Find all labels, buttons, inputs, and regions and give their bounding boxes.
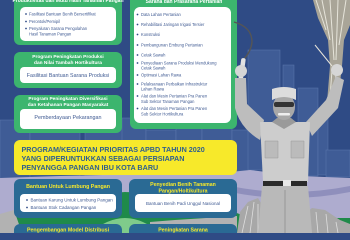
panel: diversification: Pemberdayaan Pekarangan [34,115,102,121]
title banner: YANG DIPERUNTUKKAN SEBAGAI PERSIAPAN [22,154,184,163]
list: Alat dan Mesin Pertanian Pra Panen [141,106,208,111]
list: Bantuan Karung Untuk Lumbung Pangan [30,198,113,202]
photo: farmer raising sickle and rice [234,0,350,233]
list: Perontok/Pemipil [29,19,60,24]
straw pile [237,198,350,233]
title banner [14,140,237,175]
panel: distribution model [14,224,122,240]
cap [272,87,296,100]
shirt pockets [265,141,304,158]
list: Sub Sektor Tanaman Pangan [141,99,195,104]
list: Penyaluran Sarana Pengolahan [29,26,88,31]
list: Lahan Rawa [141,86,165,92]
card [20,109,116,129]
list: Alat dan Mesin Pertanian Pra Panen [141,94,208,98]
trousers [258,186,312,233]
list: Cetak Sawah [141,66,166,70]
arms [235,78,264,140]
panel: production facilities [12,0,124,45]
green hill [0,192,350,233]
list [25,12,97,36]
heading: dan Nilai Tambah Hortikultura [34,60,102,66]
skyline background [0,50,350,180]
lilac ground [0,170,350,233]
list: Hasil Tanaman Pangan [29,32,72,36]
panel: seed supply [129,179,237,218]
panel: diversification [14,95,122,133]
list: Penyediaan Sarana Produksi Mendukung [141,60,217,66]
heading: dan Ketahanan Pangan Masyarakat [28,102,109,108]
sickle [234,22,252,60]
card [135,194,231,212]
rice bundle [313,0,350,102]
list [26,198,113,210]
list: Bantuan Stok Cadangan Pangan [30,205,97,210]
list: Konstruksi [141,32,160,37]
torso [260,122,310,182]
panel: seed supply: Bantuan Benih Padi Unggul Nasional [146,201,220,206]
hands [235,65,247,77]
heading: Program Peningkatan Produksi [32,54,104,60]
card [20,194,116,212]
straw left [0,210,237,233]
heading: Pangan/Holtikultura [158,188,208,194]
card [20,67,116,83]
list: Optimasi Lahan Rawa [141,72,182,78]
list [137,12,217,116]
list: Pelaksanaan Perbaikan Infrastruktur [141,82,208,86]
panel: horticulture: Fasilitasi Bantuan Sarana Produksi [27,73,109,79]
heading: Bantuan Untuk Lumbung Pangan [26,184,110,190]
panel: infrastructure [130,0,237,129]
heading: Program Peningkatan Diversifikasi [28,96,108,102]
list: Rehabilitasi Jaringan Irigasi Tersier [141,22,205,27]
panel: horticulture [14,52,122,88]
list: Cetak Sawah [141,52,166,58]
belt [263,181,307,186]
face [273,94,295,120]
title banner: PROGRAM/KEGIATAN PRIORITAS APBD TAHUN 2020 [22,145,205,154]
list: Fasilitasi Bantuan Benih Bersertifikat [29,12,97,16]
heading: Penyedian Benih Tanaman [150,182,216,188]
list: Sub Sektor Hortikultura [141,112,184,116]
list: Data Lahan Pertanian [141,12,182,17]
panel: food barn aid [14,179,122,218]
card [134,7,231,123]
title banner: PENYANGGA PANGAN IBU KOTA BARU [22,163,158,172]
panel: facilities improvement [129,224,237,240]
list: Pembangunan Embung Pertanian [141,42,203,48]
card [20,7,116,41]
